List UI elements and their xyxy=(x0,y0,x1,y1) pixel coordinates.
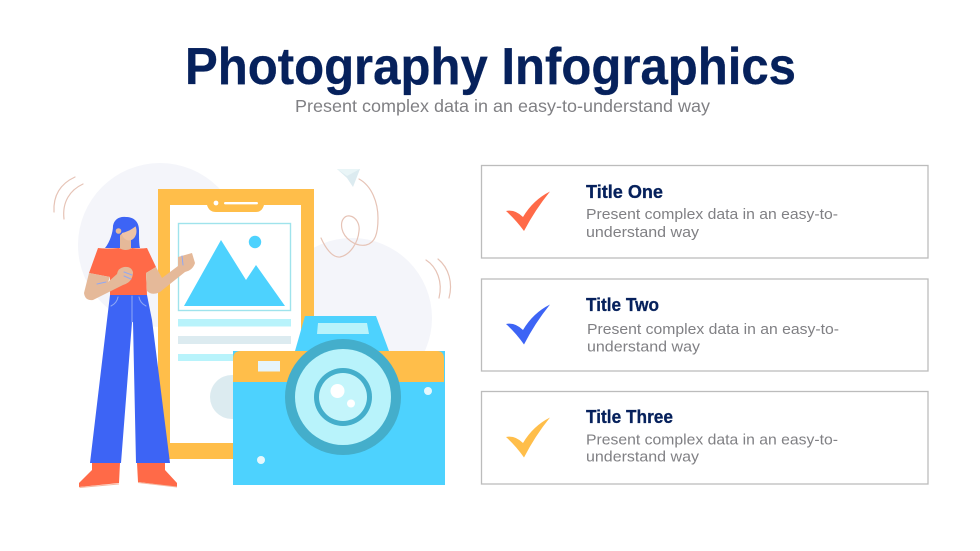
background circle right xyxy=(272,238,432,398)
card: title two xyxy=(482,279,928,371)
camera xyxy=(233,316,445,485)
shoes xyxy=(79,463,177,488)
check icon xyxy=(506,304,550,344)
paper plane xyxy=(337,169,360,187)
motion arcs left xyxy=(54,177,83,219)
viewfinder xyxy=(317,323,369,334)
phone blob xyxy=(210,375,254,419)
person xyxy=(79,217,195,488)
card: title three xyxy=(482,392,928,484)
phone xyxy=(158,189,314,459)
card: title one xyxy=(482,166,928,258)
picture mountains xyxy=(184,240,285,306)
body text: Present complex data in an easy-to- xyxy=(586,432,838,448)
picture sun xyxy=(249,236,261,248)
body text: understand way xyxy=(586,450,700,466)
heading: Title Two xyxy=(586,294,659,315)
neck xyxy=(120,234,131,251)
camera top band xyxy=(233,351,444,382)
picture frame xyxy=(178,224,290,310)
body text: understand way xyxy=(586,225,700,241)
content bars xyxy=(178,319,291,361)
plane flight path xyxy=(321,179,378,257)
background circle left xyxy=(78,163,242,327)
lens xyxy=(285,339,401,455)
left arm xyxy=(84,267,133,300)
body text: Present complex data in an easy-to- xyxy=(586,207,838,223)
check icon xyxy=(506,418,550,458)
shirt xyxy=(89,248,156,295)
title: Photography Infographics xyxy=(185,38,796,96)
check icon xyxy=(506,192,550,231)
body text: understand way xyxy=(587,340,701,356)
phone screen xyxy=(170,205,301,443)
phone speaker xyxy=(214,201,258,205)
subtitle: Present complex data in an easy-to-understand way xyxy=(295,96,710,116)
trouser pockets and seam xyxy=(111,296,146,322)
prism xyxy=(295,316,389,351)
body text: Present complex data in an easy-to- xyxy=(587,322,839,338)
motion arcs right xyxy=(426,259,451,298)
heading: Title One xyxy=(586,181,663,202)
illustration: photography scene xyxy=(54,163,451,488)
face xyxy=(122,222,136,240)
hair fringe xyxy=(113,219,137,238)
body dots xyxy=(257,387,432,464)
ear xyxy=(116,228,121,234)
flash xyxy=(258,361,280,372)
phone frame xyxy=(158,189,314,459)
trousers xyxy=(90,295,170,463)
camera body xyxy=(233,351,445,485)
right arm xyxy=(146,253,195,294)
hand details xyxy=(97,256,183,284)
hair back xyxy=(105,217,140,248)
heading: Title Three xyxy=(586,406,673,427)
